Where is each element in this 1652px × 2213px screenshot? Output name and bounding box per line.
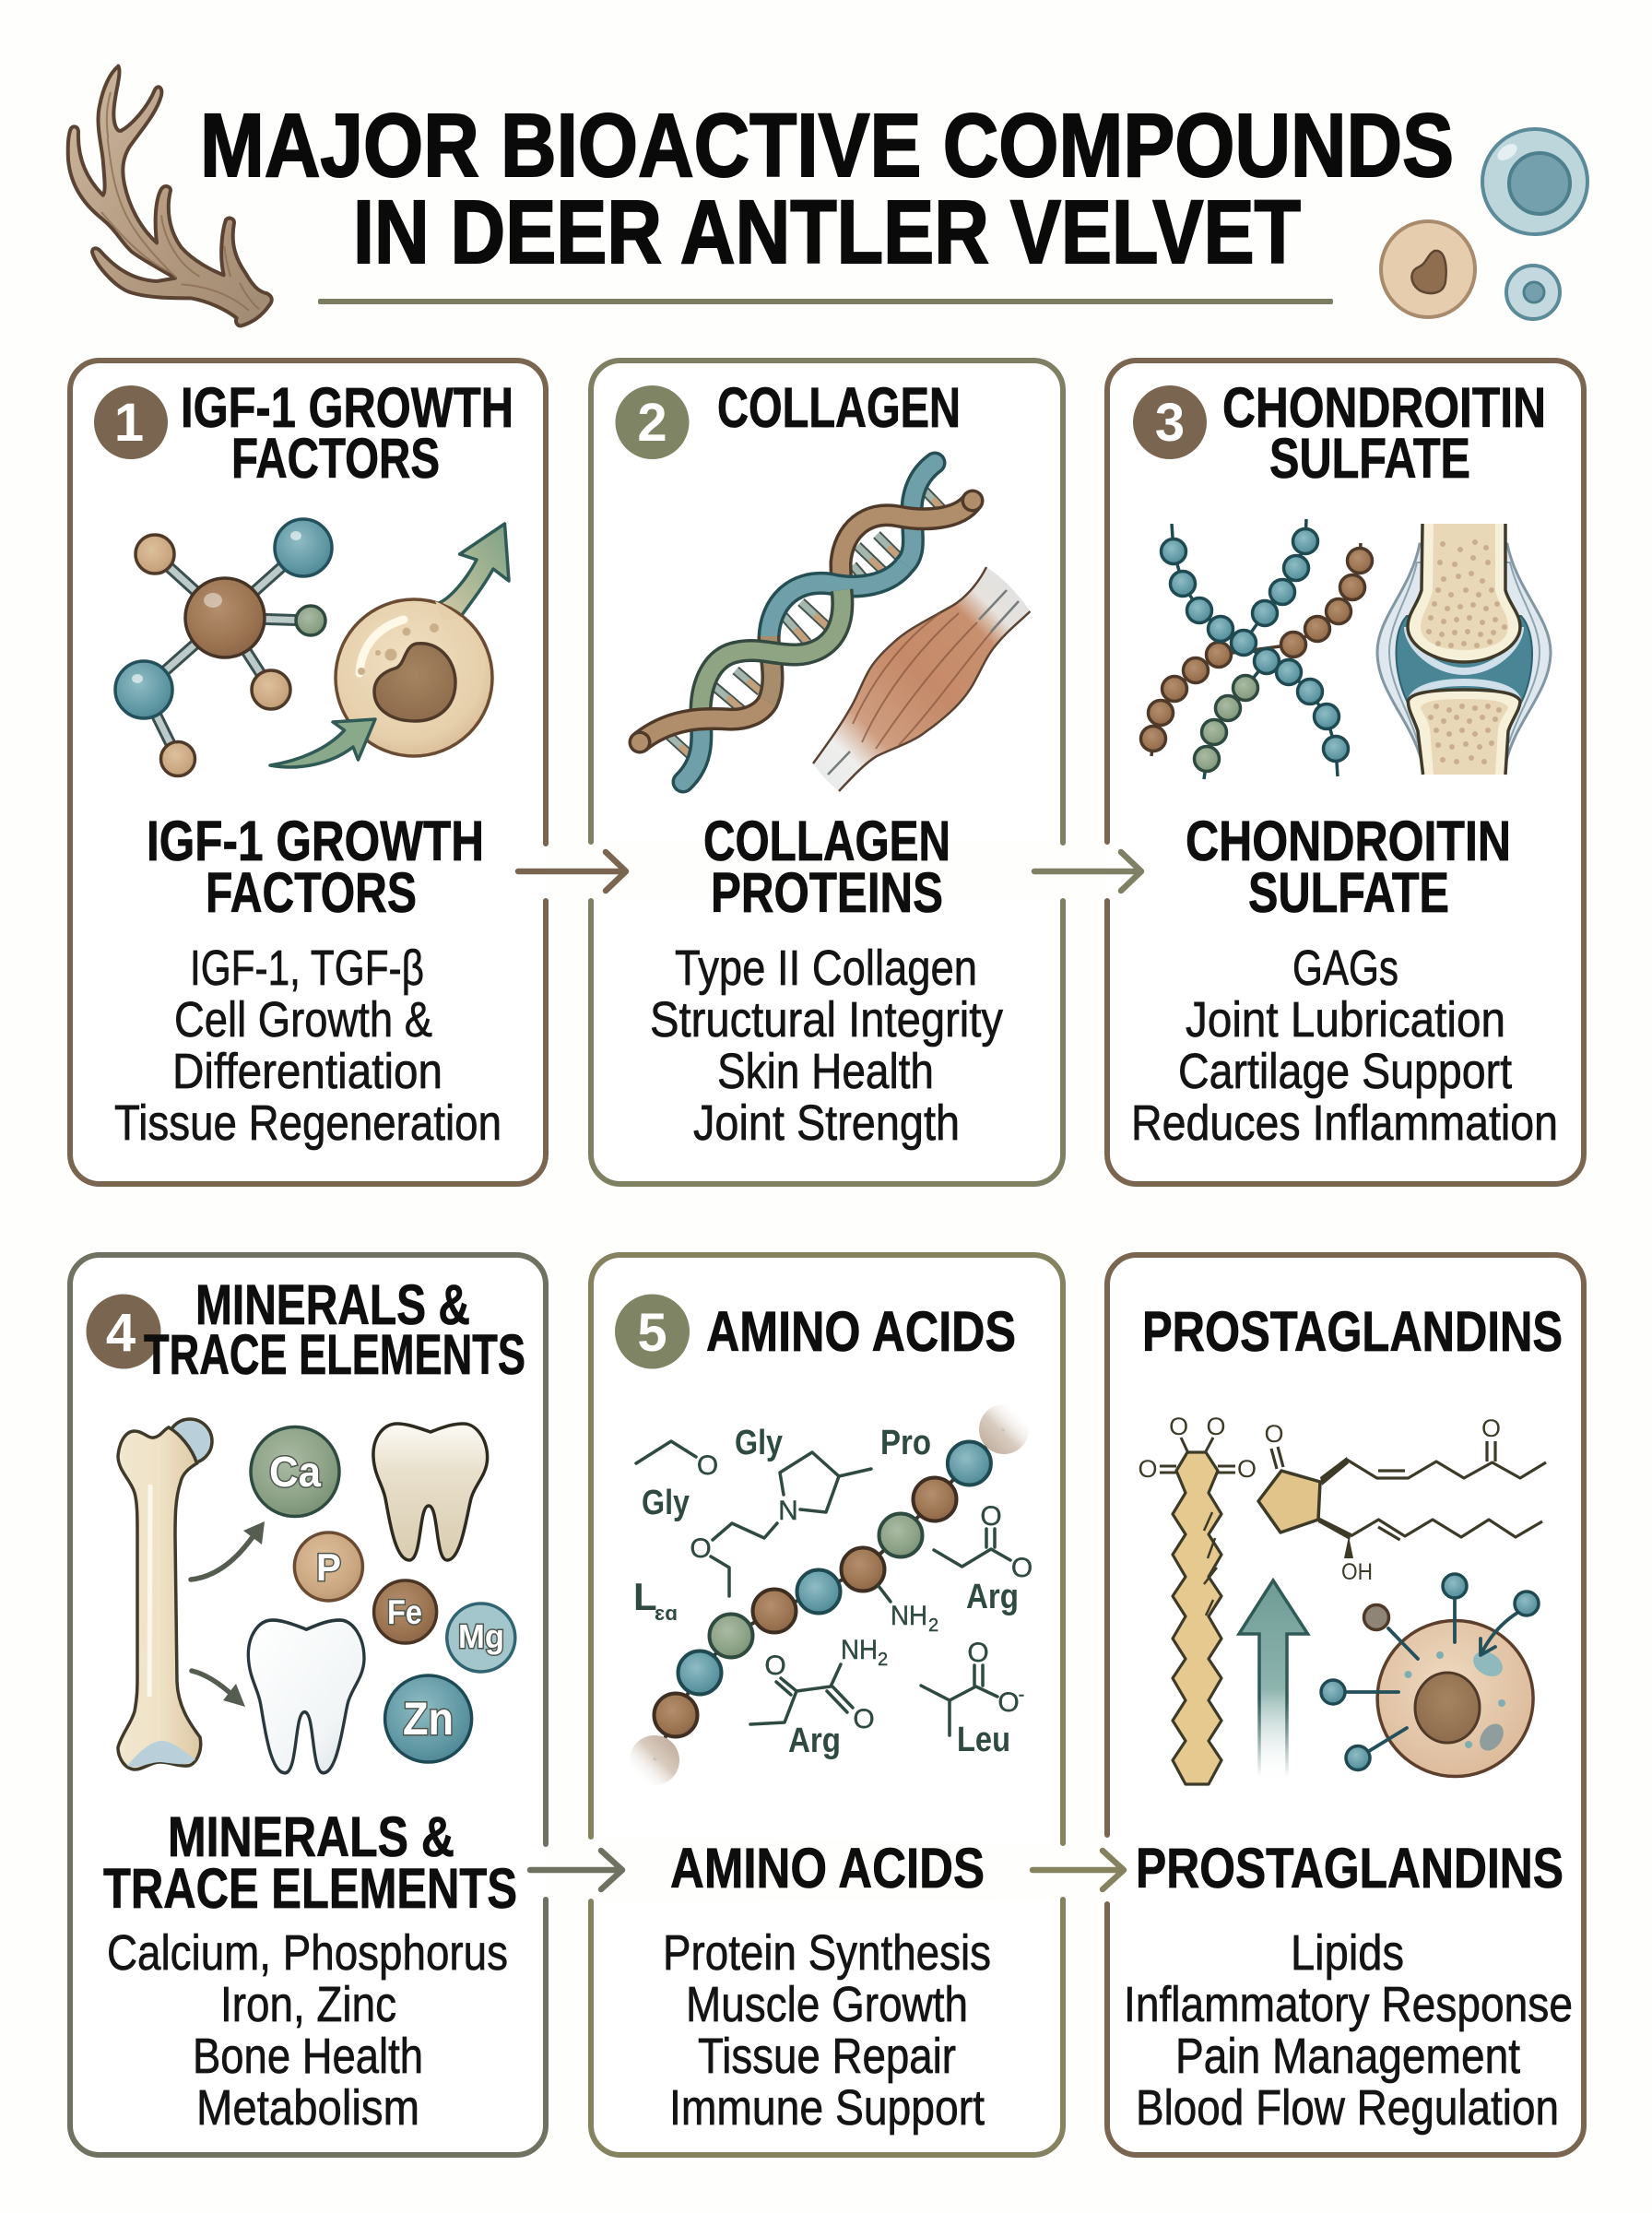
heading bbox=[144, 1273, 525, 1386]
heading: MINERALS & bbox=[195, 1273, 470, 1336]
title bbox=[200, 95, 1454, 282]
icon: joint cross-section bbox=[1377, 524, 1551, 775]
icon: mineral elements: Mg bbox=[458, 1617, 504, 1655]
icon: amino acid structures: 2 bbox=[928, 1615, 938, 1636]
icon: lower tooth bbox=[248, 1620, 364, 1773]
body text: Muscle Growth bbox=[686, 1977, 968, 2032]
body text bbox=[663, 1925, 991, 2136]
icon: amino acid structures: O bbox=[853, 1704, 875, 1734]
body text: Pain Management bbox=[1175, 2029, 1520, 2084]
icon: amino acid structures: Arg bbox=[788, 1722, 841, 1760]
body text: GAGs bbox=[1292, 941, 1398, 996]
icon: amino acid structures: O bbox=[980, 1501, 1002, 1532]
icon: lipid chain: O bbox=[1206, 1413, 1226, 1440]
arrow: panel 1 to panel 2 bbox=[518, 852, 626, 891]
icon: lipid chain: O bbox=[1138, 1455, 1158, 1483]
body text: Skin Health bbox=[717, 1044, 934, 1099]
icon: mineral elements bbox=[251, 1427, 515, 1762]
arrow: panel 4 to panel 5 bbox=[530, 1851, 622, 1889]
title: IN DEER ANTLER VELVET bbox=[353, 182, 1301, 282]
icon: cell with growth arrows bbox=[270, 524, 509, 767]
body text: Cartilage Support bbox=[1178, 1044, 1512, 1099]
badge 4: 4 bbox=[106, 1303, 136, 1363]
panel: IGF-1 growth factors bbox=[70, 361, 546, 1184]
heading: SULFATE bbox=[1269, 427, 1470, 490]
icon: mineral arrows bbox=[191, 1521, 265, 1707]
icon: amino acid chain bbox=[630, 1404, 1029, 1785]
icon: amino acid structures: O bbox=[690, 1533, 712, 1564]
body text: Bone Health bbox=[193, 2029, 423, 2084]
icon: amino acid structures: Leu bbox=[957, 1721, 1010, 1759]
icon: mineral elements: Fe bbox=[387, 1593, 422, 1631]
icon: amino acid structures: Pro bbox=[880, 1424, 931, 1462]
badge 4 bbox=[87, 1295, 160, 1368]
body text: Protein Synthesis bbox=[663, 1925, 991, 1981]
body heading bbox=[703, 810, 950, 924]
body text: Differentiation bbox=[172, 1044, 442, 1099]
icon: bead chains bbox=[1141, 519, 1372, 779]
body heading bbox=[1186, 810, 1511, 924]
badge 3: 3 bbox=[1155, 393, 1185, 453]
icon: bone bbox=[118, 1419, 212, 1769]
panel: collagen bbox=[591, 361, 1063, 1184]
icon: upper tooth bbox=[373, 1424, 488, 1560]
arrow: panel 2 to panel 3 bbox=[1034, 852, 1141, 891]
icon: lipid chain: O bbox=[1169, 1413, 1188, 1440]
panel: amino acids bbox=[591, 1255, 1063, 2155]
icon: mineral elements: P bbox=[316, 1545, 341, 1589]
icon: lipid chain: O bbox=[1237, 1455, 1257, 1483]
body text: Joint Strength bbox=[693, 1095, 960, 1151]
badge 1: 1 bbox=[114, 393, 144, 453]
icon: amino acid structures: O bbox=[697, 1450, 718, 1481]
heading: IGF-1 GROWTH bbox=[181, 376, 513, 439]
badge 3 bbox=[1133, 385, 1207, 459]
body text bbox=[114, 941, 502, 1151]
arrow: panel 5 to panel 6 bbox=[1032, 1851, 1124, 1889]
body heading: PROSTAGLANDINS bbox=[1136, 1837, 1564, 1899]
body text: Iron, Zinc bbox=[220, 1977, 396, 2032]
body text bbox=[650, 941, 1003, 1151]
icon: deer antler bbox=[68, 66, 272, 325]
heading: FACTORS bbox=[231, 427, 440, 490]
badge 2 bbox=[616, 385, 690, 459]
icon: mineral elements: Zn bbox=[403, 1693, 454, 1745]
icon: amino acid structures: NH bbox=[841, 1635, 878, 1665]
body heading: AMINO ACIDS bbox=[670, 1837, 985, 1899]
title underline bbox=[318, 299, 1333, 304]
icon: amino acid structures: O bbox=[764, 1651, 786, 1681]
panel: minerals and trace elements bbox=[70, 1255, 546, 2155]
body heading: CHONDROITIN bbox=[1186, 810, 1511, 872]
heading: COLLAGEN bbox=[717, 376, 961, 439]
body text: Metabolism bbox=[196, 2080, 419, 2136]
heading: CHONDROITIN bbox=[1222, 376, 1546, 439]
body text: Type II Collagen bbox=[675, 941, 977, 996]
icon: molecule bbox=[115, 519, 332, 776]
body text: Reduces Inflammation bbox=[1131, 1095, 1558, 1151]
body text bbox=[1124, 1925, 1573, 2136]
body heading: FACTORS bbox=[206, 861, 417, 924]
body heading: PROTEINS bbox=[711, 861, 943, 924]
icon: up arrow bbox=[1239, 1580, 1308, 1777]
icon: tan cell bbox=[1381, 221, 1475, 317]
body text bbox=[107, 1925, 508, 2136]
body text: Immune Support bbox=[669, 2080, 985, 2136]
body text: Calcium, Phosphorus bbox=[107, 1925, 508, 1981]
icon: amino acid structures: L bbox=[633, 1575, 657, 1618]
icon: muscle and tendon bbox=[813, 567, 1031, 791]
body heading: IGF-1 GROWTH bbox=[147, 810, 484, 872]
panel: prostaglandins bbox=[1107, 1255, 1584, 2155]
badge 1 bbox=[94, 385, 168, 459]
body heading: COLLAGEN bbox=[703, 810, 950, 872]
body heading bbox=[147, 810, 484, 924]
icon: amino acid structures: Gly bbox=[735, 1424, 783, 1462]
badge 2: 2 bbox=[637, 393, 667, 453]
icon: lipid chain bbox=[1138, 1413, 1257, 1784]
body text: Cell Growth & bbox=[174, 992, 432, 1047]
icon: amino acid structures: - bbox=[1019, 1685, 1024, 1705]
body text: Joint Lubrication bbox=[1186, 992, 1505, 1047]
body text: Structural Integrity bbox=[650, 992, 1003, 1047]
body text: IGF-1, TGF-β bbox=[190, 941, 424, 996]
heading: AMINO ACIDS bbox=[706, 1300, 1016, 1363]
body text: Tissue Repair bbox=[698, 2029, 956, 2084]
body text: Lipids bbox=[1291, 1925, 1404, 1981]
body text: Tissue Regeneration bbox=[114, 1095, 502, 1151]
icon: amino acid structures: O bbox=[1011, 1553, 1032, 1583]
icon: mineral elements: Ca bbox=[269, 1448, 321, 1496]
heading bbox=[1222, 376, 1546, 490]
body heading bbox=[103, 1805, 517, 1920]
icon: prostaglandin structure bbox=[1258, 1414, 1546, 1585]
icon: prostaglandin structure: OH bbox=[1341, 1559, 1373, 1585]
icon: amino acid structures: Arg bbox=[966, 1578, 1019, 1616]
badge 5 bbox=[615, 1295, 690, 1368]
icon: cell with receptors bbox=[1321, 1574, 1539, 1776]
body text: Blood Flow Regulation bbox=[1136, 2080, 1559, 2136]
icon: amino acid structures: O bbox=[967, 1638, 989, 1668]
panel: chondroitin sulfate bbox=[1107, 361, 1584, 1184]
icon: prostaglandin structure: O bbox=[1481, 1414, 1501, 1442]
heading bbox=[181, 376, 513, 490]
icon: amino acid structures bbox=[633, 1424, 1032, 1760]
icon: amino acid structures: Gly bbox=[642, 1484, 690, 1522]
title: MAJOR BIOACTIVE COMPOUNDS bbox=[200, 95, 1454, 195]
body text: Inflammatory Response bbox=[1124, 1977, 1573, 2032]
badge 5: 5 bbox=[637, 1303, 667, 1363]
body heading: MINERALS & bbox=[168, 1805, 454, 1868]
heading: PROSTAGLANDINS bbox=[1142, 1300, 1563, 1363]
body text bbox=[1131, 941, 1558, 1151]
icon: amino acid structures: NH bbox=[891, 1601, 927, 1631]
body heading: TRACE ELEMENTS bbox=[103, 1857, 517, 1920]
heading: TRACE ELEMENTS bbox=[144, 1323, 525, 1386]
body heading: SULFATE bbox=[1248, 861, 1449, 924]
icon: collagen helix bbox=[629, 463, 985, 782]
icon: prostaglandin structure: O bbox=[1264, 1420, 1284, 1448]
icon: small teal cell bbox=[1506, 266, 1560, 319]
icon: amino acid structures: N bbox=[778, 1496, 798, 1526]
icon: teal cell large bbox=[1482, 129, 1587, 234]
icon: amino acid structures: 2 bbox=[878, 1650, 888, 1670]
icon: amino acid structures: O bbox=[997, 1687, 1020, 1718]
icon: amino acid structures: ɛɑ bbox=[655, 1602, 678, 1625]
